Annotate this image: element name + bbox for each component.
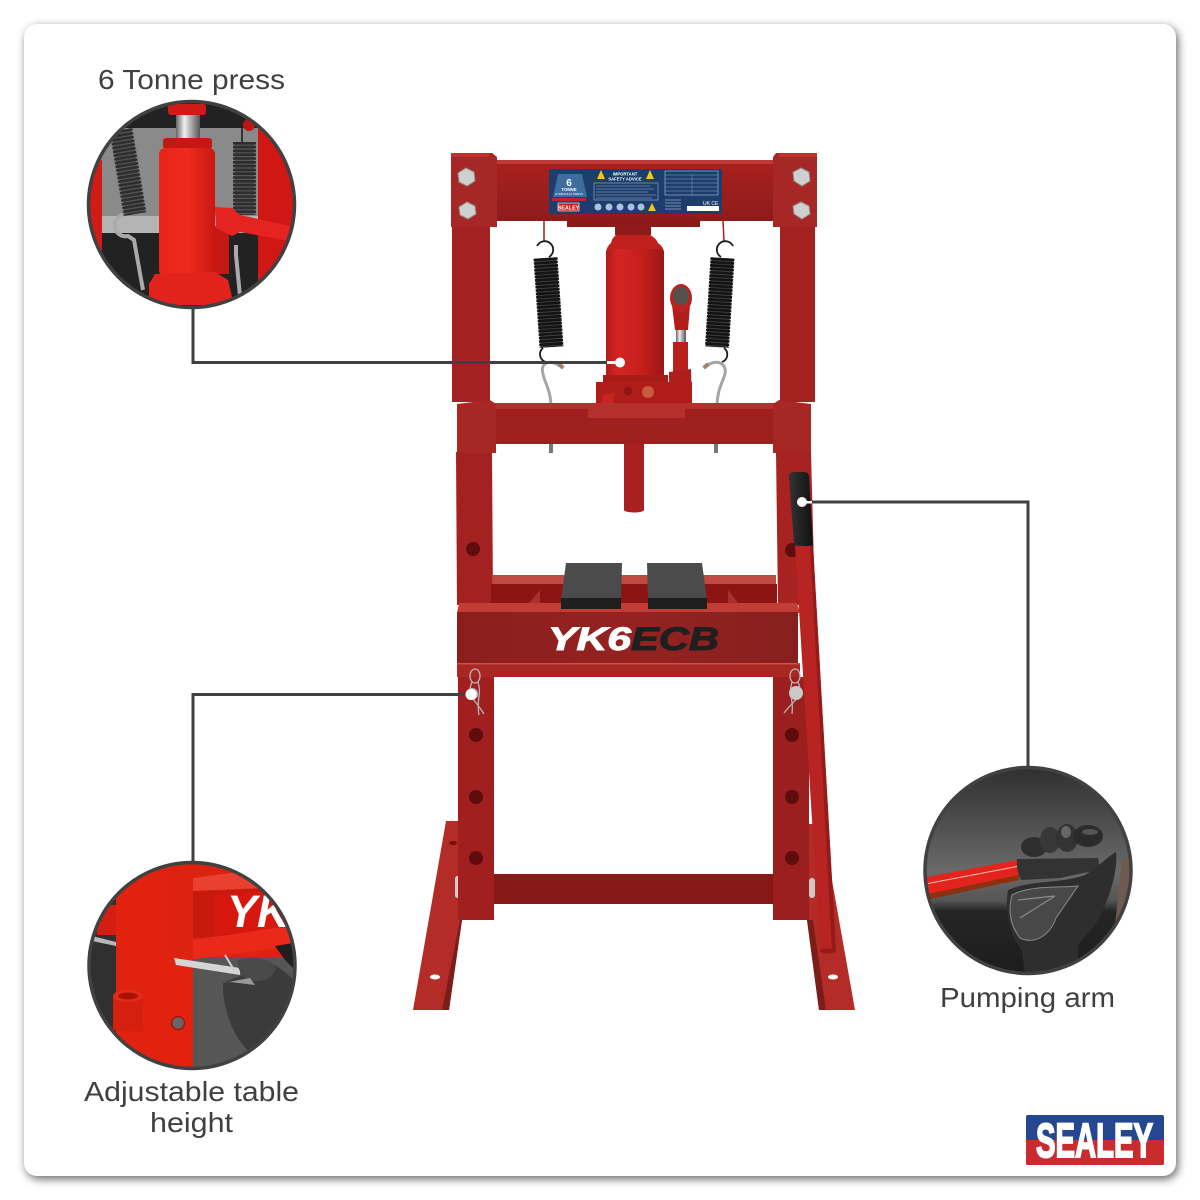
caption: Adjustable table height: Adjustable table — [84, 1076, 299, 1107]
callout line: pumping arm — [797, 497, 1028, 767]
safety label: TONNE — [561, 187, 577, 192]
bolts — [458, 168, 810, 219]
safety label: SEALEY — [558, 206, 580, 212]
top beam — [451, 153, 817, 227]
middle beam — [457, 400, 811, 453]
left spring with hooks — [537, 220, 565, 408]
safety label: HYDRAULIC PRESS — [555, 192, 583, 196]
bottom cross bar — [494, 874, 773, 904]
callout line: jack — [193, 308, 625, 368]
upper right post — [776, 227, 815, 605]
model name: ECB — [631, 621, 719, 657]
press table — [457, 575, 800, 677]
caption: Pumping arm: Pumping arm — [940, 982, 1115, 1013]
caption: Adjustable table height: height — [150, 1107, 233, 1138]
hydraulic bottle jack — [588, 227, 692, 418]
circle: adjustable table close-up — [85, 860, 300, 1075]
pressing plates — [561, 563, 707, 609]
safety label: SAFETY ADVICE — [608, 176, 642, 182]
spring clips and pins — [466, 669, 803, 715]
safety label: UK CE — [703, 201, 719, 207]
model name: YK6 — [548, 621, 631, 657]
left foot — [413, 821, 462, 1010]
circle: jack close-up — [85, 98, 300, 313]
heading: 6 Tonne press: 6 Tonne press — [98, 64, 285, 95]
safety label: IMPORTANT — [613, 172, 638, 176]
upper left post — [452, 227, 493, 605]
circle: pumping arm close-up — [920, 765, 1135, 980]
right spring with hooks — [702, 220, 733, 408]
safety label — [549, 169, 722, 214]
pumping arm — [789, 472, 836, 954]
lower right post — [773, 677, 809, 920]
callout line: table height — [193, 689, 476, 863]
YK lettering on table: YK — [227, 886, 293, 937]
press machine — [413, 153, 855, 1010]
safety label: 6 — [566, 178, 572, 189]
lower left post — [458, 677, 494, 920]
ram and rods — [549, 444, 718, 512]
right foot — [807, 824, 855, 1010]
